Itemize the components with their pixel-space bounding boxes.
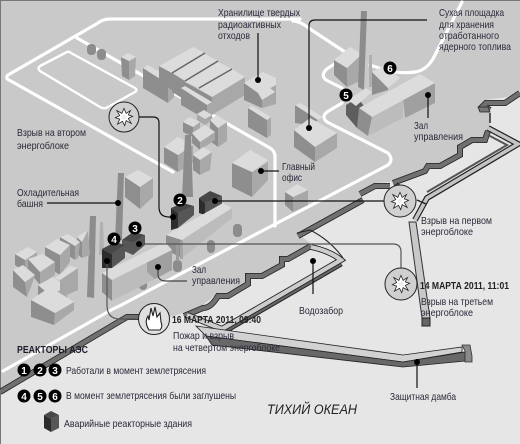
large block group <box>159 47 245 125</box>
icon: explosion, unit 1 <box>384 185 416 217</box>
back building near road <box>294 103 337 162</box>
label: water intake: Водозабор <box>299 305 343 317</box>
label: unit 4 fire <box>172 314 280 354</box>
intake harbour <box>187 230 343 332</box>
unit 3 reactor building <box>122 232 145 255</box>
unit 2 reactor building <box>171 203 194 230</box>
legend row: shut down units: 5 <box>37 392 43 403</box>
badge 4 <box>108 232 120 246</box>
label: cooling tower: башня <box>17 198 43 210</box>
label: unit 2 explosion <box>17 127 86 152</box>
badge 2 <box>174 194 186 207</box>
label: unit 2 explosion: энергоблоке <box>17 140 69 152</box>
legend <box>17 344 236 432</box>
west building cluster <box>13 230 90 325</box>
label: cooling tower <box>17 187 79 210</box>
badge 2: 2 <box>177 196 183 207</box>
solid waste storage <box>244 72 276 138</box>
leader lines <box>47 20 428 388</box>
label: control room, south <box>192 264 240 287</box>
label: unit 2 explosion: Взрыв на втором <box>17 127 86 139</box>
label: solid waste storage <box>218 7 301 42</box>
legend row: operating units: 3 <box>52 366 58 377</box>
label: unit 3 explosion: Взрыв на третьем <box>421 296 493 308</box>
label: unit 4 fire: на четвертом энергоблоке <box>173 342 280 354</box>
label: control room, north <box>414 120 463 143</box>
legend row: shut down units: 6 <box>52 392 58 403</box>
legend row: damaged reactor buildings: Аварийные реакторные здания <box>64 418 192 430</box>
turbine hall, units 1-2 <box>166 203 232 261</box>
legend row: operating units: 2 <box>37 366 43 377</box>
label: unit 1 explosion: Взрыв на первом <box>421 215 492 227</box>
badge 4: 4 <box>111 235 117 246</box>
label: control room, south: Зал <box>192 264 206 276</box>
label: unit 1 explosion <box>421 215 492 238</box>
label: control room, north: Зал <box>414 120 428 132</box>
label: dry storage: отработанного <box>439 30 499 42</box>
label: unit 3 explosion: энергоблоке <box>421 307 473 319</box>
label: unit 4 fire: Пожар и взрыв <box>173 330 234 342</box>
roads <box>3 2 462 371</box>
protective dam <box>196 326 472 367</box>
sea walls <box>0 93 520 392</box>
label: dry storage: Сухая площадка <box>439 7 504 19</box>
label: protective dam: Защитная дамба <box>390 391 456 403</box>
turbine hall, units 3-4 <box>102 242 172 301</box>
legend heading: РЕАКТОРЫ АЭС <box>17 344 88 356</box>
legend row: damaged reactor buildings <box>44 411 192 432</box>
label: Pacific Ocean: ТИХИЙ ОКЕАН <box>267 400 358 417</box>
label: dry storage <box>439 7 511 53</box>
legend row: shut down units: 4 <box>21 392 27 403</box>
label: unit 1 explosion: энергоблоке <box>421 226 473 238</box>
label: unit 3 explosion <box>420 280 509 319</box>
label: main office <box>282 161 315 184</box>
legend row: shut down units: В момент землетрясения были заглушены <box>66 390 236 402</box>
units 5-6 buildings <box>334 11 400 128</box>
badge 3: 3 <box>132 224 138 235</box>
harbour wall, first units <box>397 128 518 220</box>
legend row: operating units: Работали в момент землетрясения <box>66 365 206 377</box>
legend row: shut down units <box>18 390 236 403</box>
central cluster <box>164 115 227 175</box>
small cube <box>285 184 308 212</box>
badge 6 <box>384 62 396 75</box>
badge 5 <box>340 88 352 102</box>
tanks, north <box>87 44 106 60</box>
chimneys <box>87 135 193 298</box>
badge 6: 6 <box>387 64 393 75</box>
units 5-6 turbine hall <box>357 74 435 136</box>
label: solid waste storage: радиоактивных <box>218 19 282 31</box>
unit 1 reactor building <box>199 191 222 215</box>
label: control room, south: управления <box>192 275 240 287</box>
legend row: operating units: 1 <box>21 366 27 377</box>
cube near cooling tower <box>125 170 153 209</box>
label: solid waste storage: отходов <box>218 30 250 42</box>
north buildings <box>121 53 174 103</box>
narrow breakwater <box>409 222 430 326</box>
label: dry storage: для хранения <box>439 19 494 31</box>
legend row: operating units <box>18 364 206 377</box>
label: unit 4 fire: 16 МАРТА 2011, 09:40 <box>172 314 261 326</box>
badge 5: 5 <box>343 91 349 102</box>
label: main office: офис <box>282 172 302 184</box>
label: cooling tower: Охладительная <box>17 187 79 199</box>
badge 3 <box>128 222 142 235</box>
tanks, central <box>139 224 242 290</box>
leader dots <box>104 77 431 365</box>
unit 4 reactor building <box>102 242 125 268</box>
main office <box>232 150 268 197</box>
icon: explosion, unit 2 <box>109 102 139 132</box>
label: control room, north: управления <box>414 131 463 143</box>
icon: explosion, unit 3 <box>385 268 417 300</box>
label: solid waste storage: Хранилище твердых <box>218 7 301 19</box>
label: main office: Главный <box>282 161 315 173</box>
icon: fire, unit 4 <box>138 304 170 334</box>
